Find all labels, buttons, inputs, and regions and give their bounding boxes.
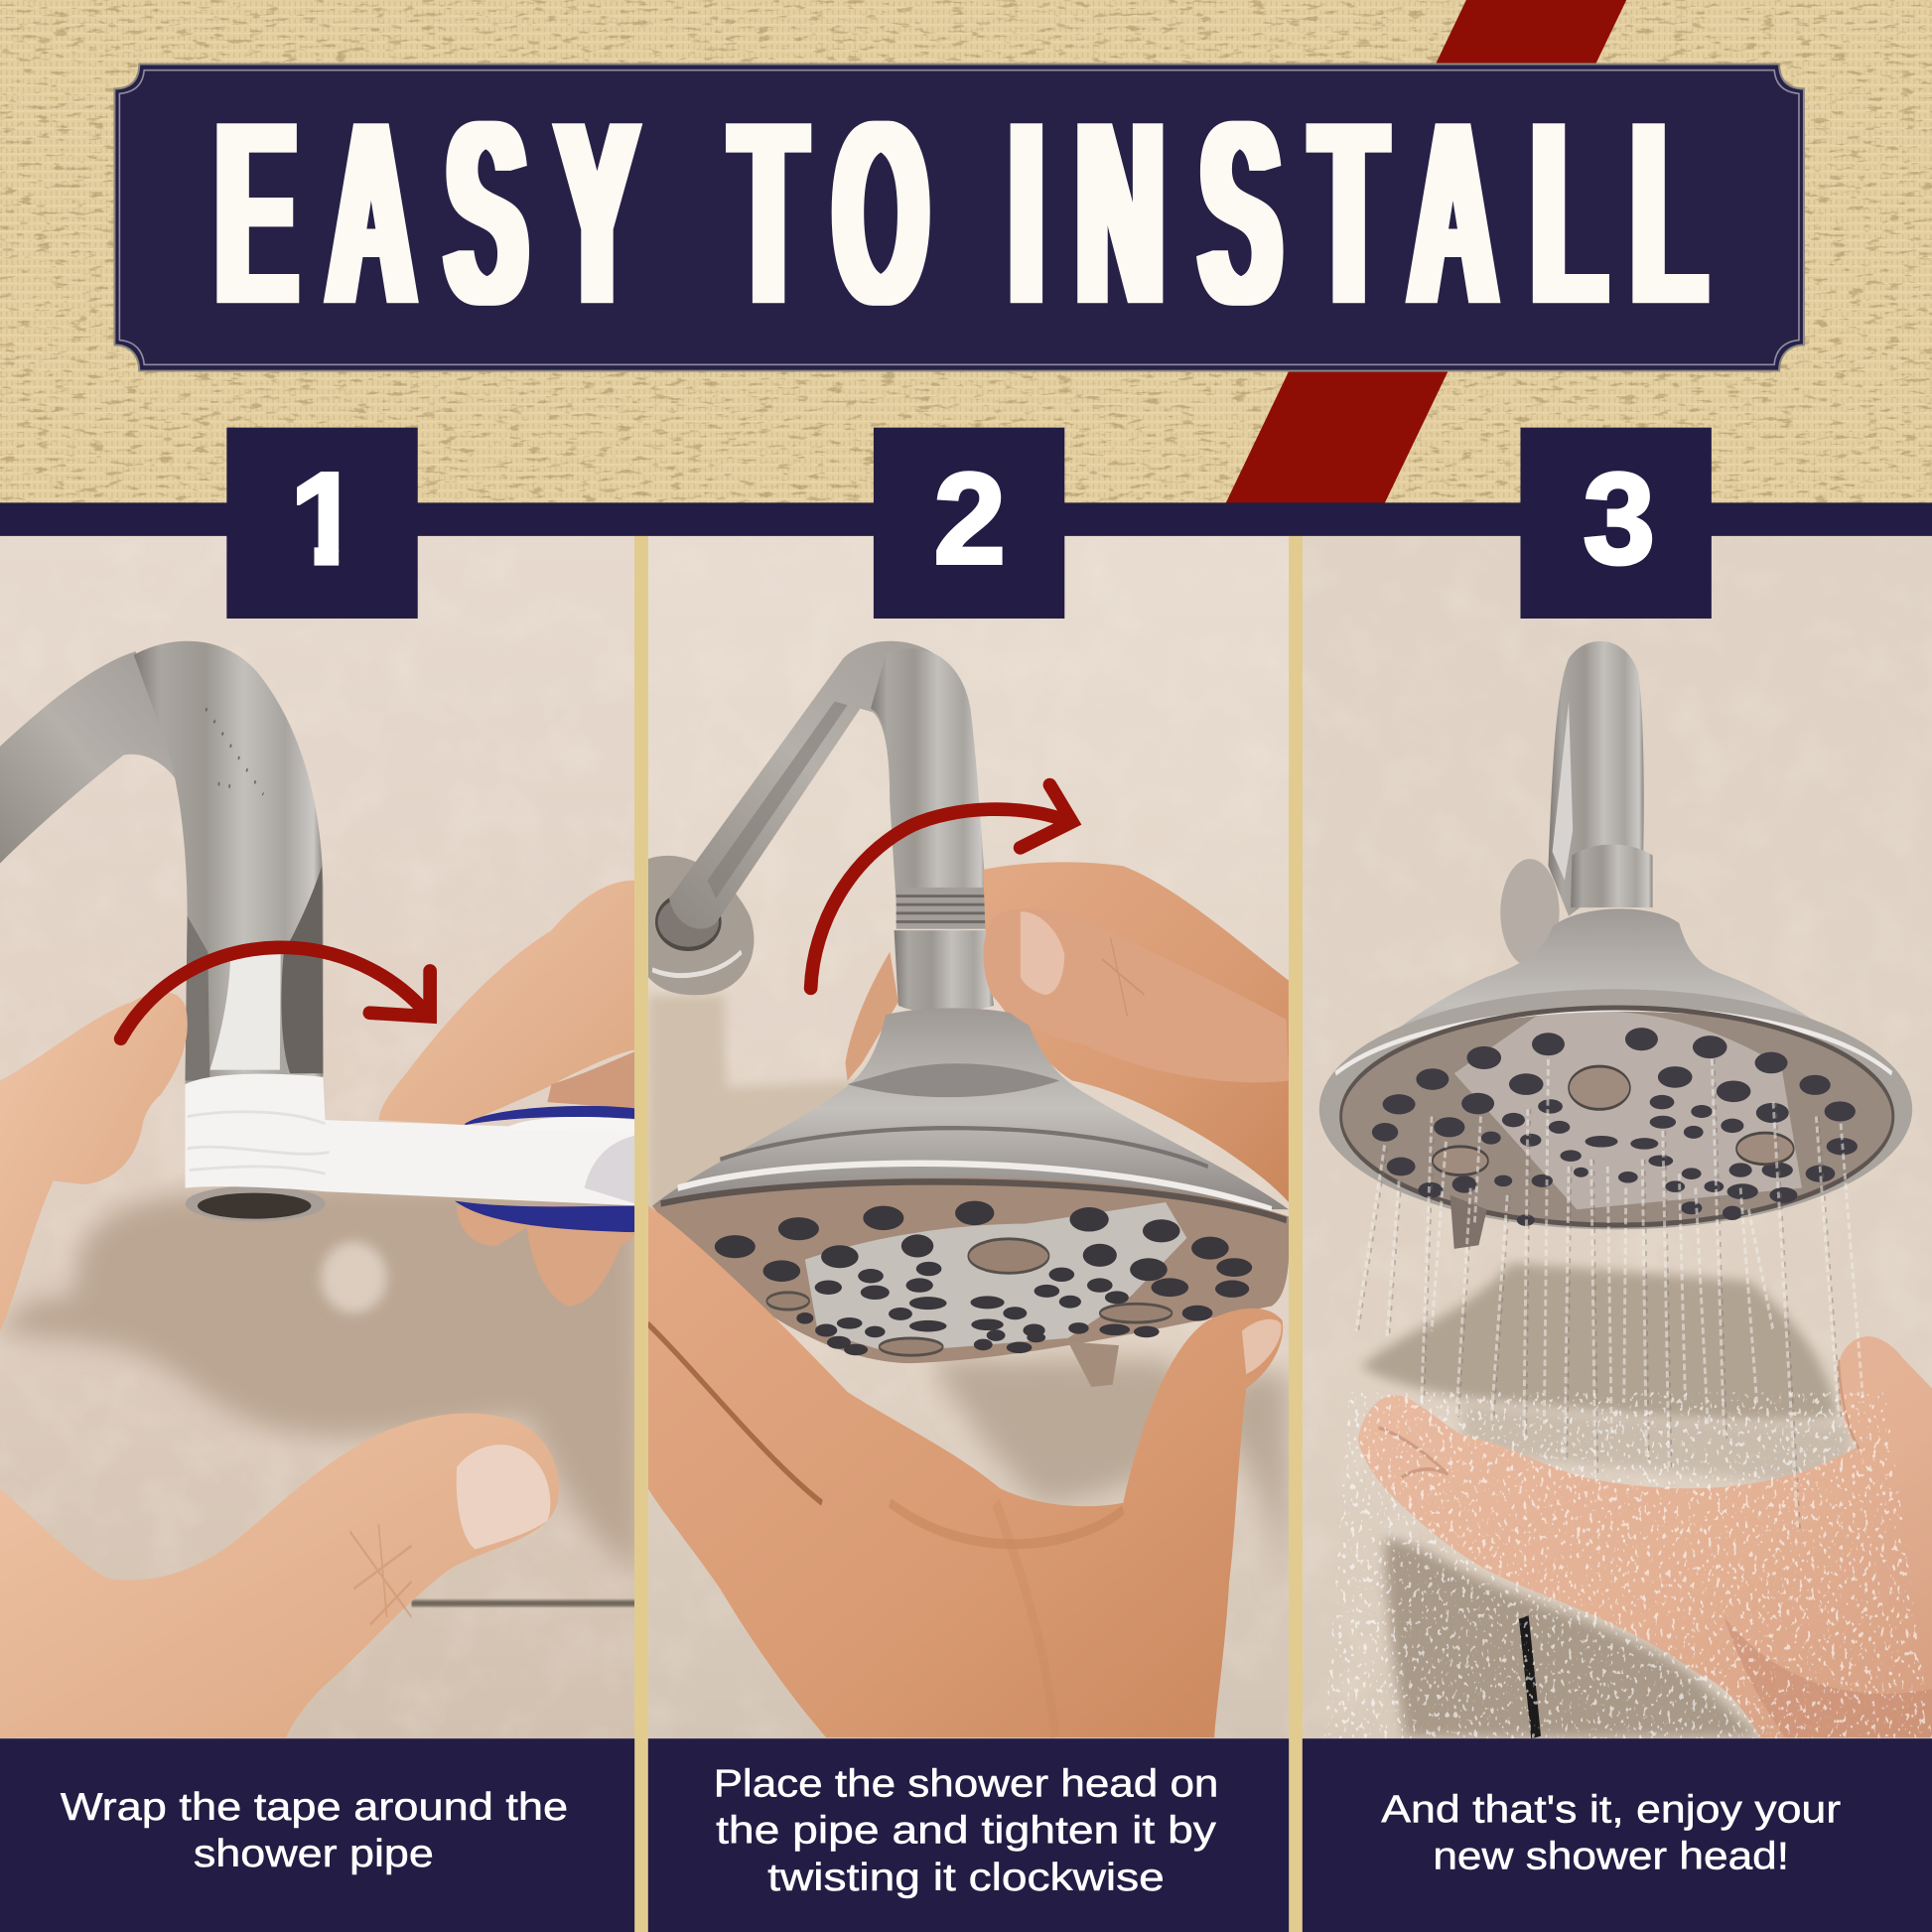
step number 1 bbox=[226, 428, 418, 619]
collar bbox=[895, 930, 994, 1014]
mounting tab bbox=[1068, 1342, 1119, 1387]
step number 1: 1 bbox=[291, 446, 362, 591]
bottom thumb bbox=[0, 1413, 559, 1737]
pipe bbox=[1548, 641, 1644, 916]
panel: step 1 photo, wrapping the tape bbox=[0, 536, 642, 1738]
shower head face bbox=[652, 1177, 1290, 1363]
panel: step 2 photo, tightening the shower head bbox=[648, 536, 1290, 1738]
mounting tab bbox=[1450, 1195, 1487, 1249]
caption: step 2 bbox=[648, 1738, 1289, 1932]
gold panel divider left bbox=[634, 536, 648, 1932]
textured burlap background bbox=[0, 0, 1932, 505]
caption: step 1 bbox=[0, 1738, 634, 1932]
water droplets over the hand bbox=[1324, 1392, 1932, 1738]
gold panel divider right bbox=[1289, 536, 1303, 1932]
wall plate bbox=[1500, 859, 1560, 966]
step number 3: 3 bbox=[1584, 446, 1655, 591]
wall shadows bbox=[1360, 1263, 1839, 1422]
dome bbox=[1331, 908, 1904, 1102]
right hand with tape roll bbox=[378, 881, 642, 1307]
shower head nozzles bbox=[715, 1201, 1252, 1355]
arrow: clockwise tape direction bbox=[121, 947, 430, 1038]
shower arm and pipe bbox=[669, 641, 987, 929]
pipe bend and vertical section bbox=[134, 641, 323, 1088]
falling water streams bbox=[1356, 1059, 1863, 1532]
spray outlets bbox=[766, 1239, 1172, 1355]
arrow: clockwise twist direction bbox=[811, 785, 1072, 988]
tile joint bbox=[412, 1600, 642, 1606]
lower hand holding head bbox=[648, 1206, 1283, 1737]
wall shadow bbox=[0, 1180, 642, 1575]
light spot on wall bbox=[321, 1242, 387, 1313]
caption: step 3: new shower head! bbox=[1433, 1836, 1789, 1878]
caption: step 1: shower pipe bbox=[194, 1833, 434, 1875]
caption: step 3: And that's it, enjoy your bbox=[1381, 1789, 1841, 1832]
spray outlets bbox=[1433, 1066, 1794, 1175]
open hand bbox=[1358, 1336, 1932, 1737]
title text: EASY TO INSTALL bbox=[216, 69, 1706, 359]
thumb pressing collar bbox=[983, 908, 1289, 1082]
caption: step 1: Wrap the tape around the bbox=[61, 1786, 568, 1829]
dark floor cable bbox=[1524, 1617, 1536, 1737]
caption: step 2: Place the shower head on bbox=[714, 1762, 1218, 1805]
step number 2 bbox=[874, 428, 1064, 619]
panel: step 3 photo, water running over a hand bbox=[1303, 536, 1932, 1738]
step number 3 bbox=[1520, 428, 1712, 619]
tape wrapped on pipe bbox=[186, 1074, 642, 1221]
collar bbox=[1571, 845, 1653, 907]
left pinching fingers bbox=[0, 992, 188, 1331]
header band bbox=[0, 502, 1932, 536]
wall plate flange bbox=[648, 856, 754, 995]
caption: step 2: twisting it clockwise bbox=[767, 1857, 1165, 1899]
nozzles bbox=[1372, 1028, 1858, 1226]
title banner bbox=[114, 65, 1804, 371]
shower head dome bbox=[652, 1008, 1289, 1209]
caption: step 3 bbox=[1303, 1738, 1932, 1932]
shower arm bbox=[0, 651, 181, 868]
step number 2: 2 bbox=[933, 446, 1006, 591]
back fingers bbox=[983, 862, 1289, 1202]
wall shadows bbox=[648, 995, 856, 1231]
red diagonal stripe bbox=[1225, 0, 1626, 505]
caption: step 2: the pipe and tighten it by bbox=[716, 1810, 1217, 1853]
threaded pipe end bbox=[897, 888, 988, 929]
rim and face bbox=[1319, 989, 1912, 1229]
